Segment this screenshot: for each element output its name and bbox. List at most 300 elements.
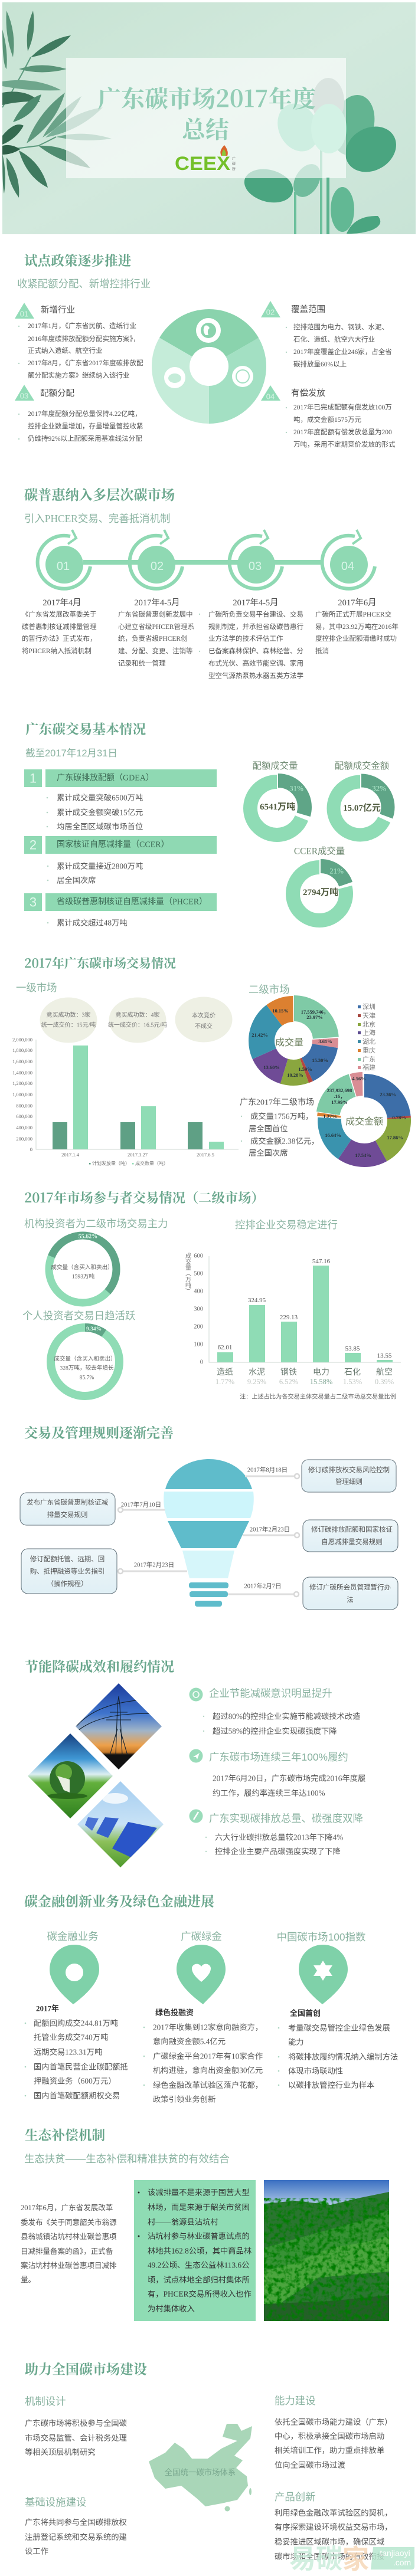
- title card: [66, 58, 346, 178]
- block: mechanism design: 广东碳市场将积极参与全国碳: [25, 2418, 127, 2427]
- ring: institutions: 55.62%: [79, 1233, 97, 1240]
- column: green finance: 广碳绿金平台2017年有10家合作: [153, 2051, 263, 2060]
- donut: secondary market volume: 15.30%: [312, 1057, 328, 1063]
- block 03: allocation: 03: [20, 392, 28, 400]
- column: green finance: 意向融资金额5.4亿元: [153, 2037, 226, 2046]
- step 3 text: 业方法学的技术评估工作: [208, 634, 283, 643]
- donut: secondary market amount: 16.64%: [325, 1132, 341, 1138]
- donut: CCER volume: 2794万吨: [303, 887, 338, 897]
- finding 1: 超过58%的控排企业实现碳强度下降: [213, 1726, 337, 1736]
- rule: 2017-07-10: 排量交易规则: [47, 1510, 87, 1519]
- donut: secondary market amount: [323, 1076, 406, 1158]
- column: carbon 100 index: 考量碳交易管控企业绿色发展: [288, 2023, 390, 2032]
- ring: institutions: 成交量（含买入和卖出）: [51, 1263, 113, 1271]
- rule: 2017-02-23 right: 2017年2月23日: [250, 1526, 290, 1533]
- green callout: 有，PHCER交易所得收入也作: [148, 2289, 252, 2299]
- step 2 text: 心建立省级PHCER管理系: [118, 622, 194, 631]
- block 01: new industries: 额分配实施方案》继续纳入该行业: [28, 371, 130, 379]
- green callout: 为村集体收入: [148, 2305, 195, 2313]
- bar chart: industries: 300: [194, 1306, 203, 1312]
- bar chart: industries: 钢铁: [280, 1366, 297, 1378]
- secondary market label: 二级市场: [249, 984, 290, 995]
- legend: 上海: [363, 1028, 375, 1037]
- hero banner: [2, 2, 416, 234]
- finding 2: [189, 1749, 365, 1797]
- donut: quota amount: 15.07亿元: [343, 803, 381, 813]
- finding 2: 约工作，履约率连续三年达100%: [213, 1788, 325, 1797]
- green callout: 49.2公顷、生态公益林113.6公: [148, 2261, 249, 2269]
- illustration: olive leaves: [2, 11, 112, 198]
- block 04: paid issuance: 04: [266, 392, 275, 401]
- block 04: paid issuance: 万吨，采用不定期竞价发放的形式: [293, 440, 396, 448]
- donut: secondary market volume: 23.97%: [306, 1014, 323, 1020]
- legend: 天津: [363, 1012, 375, 1020]
- block: infrastructure: 广东将共同参与全国碳排放权: [25, 2517, 127, 2526]
- green callout: 林场，而是来源于韶关市贫困: [148, 2202, 250, 2211]
- block 01: new industries: 2017年8月，《广东省2017年度碳排放配: [28, 359, 143, 367]
- rule: 2017-02-23 right: 自愿减排量交易规则: [321, 1538, 383, 1546]
- block: mechanism design: 等相关顶层机制研究: [25, 2447, 96, 2457]
- subheading: institutions: 机构投资者为二级市场交易主力: [24, 1218, 168, 1230]
- step 2 text: 广东省碳普惠创新发展中: [118, 610, 192, 618]
- column: green finance: 2017年收集到12家意向融资方，: [153, 2023, 263, 2032]
- donut: secondary market volume: 1.59%: [298, 1066, 312, 1072]
- bar chart: industries: 400: [194, 1289, 203, 1294]
- light bulb graphic: [164, 1459, 254, 1607]
- block: product innovation: 利用绿色金融改革试验区的契机，: [275, 2508, 392, 2517]
- rule: 2017-08-18: 管理细则: [335, 1477, 363, 1486]
- bar chart: industries: 1.77%: [215, 1378, 234, 1386]
- timeline node 02: 02: [151, 560, 164, 573]
- block: capacity building: [275, 2395, 392, 2470]
- block: mechanism design: [25, 2395, 127, 2457]
- bar chart: industries: 53.85: [345, 1345, 360, 1352]
- heading: 节能降碳成效和履约情况: [25, 1656, 174, 1676]
- step 4 text: 抵消: [315, 647, 329, 655]
- green callout: 沾坑村参与林业碳普惠试点的: [148, 2231, 250, 2241]
- block: infrastructure: 设工作: [25, 2546, 48, 2556]
- step 3 text: 已备案森林保护、森林经营、分: [208, 647, 303, 655]
- logo: CEEX: 碳: [232, 160, 236, 166]
- timeline node 01: [38, 530, 90, 589]
- y axis labels: [12, 1037, 32, 1152]
- donut: secondary market amount: 237,932,698: [327, 1087, 352, 1093]
- finding 2: 广东碳市场连续三年100%履约: [209, 1751, 348, 1763]
- auction bubbles: 统一成交价：15元/吨: [41, 1021, 96, 1029]
- y axis labels: 200,000: [16, 1136, 32, 1142]
- heading: 2017年广东碳市场交易情况: [24, 954, 176, 972]
- step 4 text: 度控排企业配额清缴时成功: [315, 634, 397, 643]
- rule: 2017-02-07: 法: [347, 1595, 354, 1604]
- donut: secondary market amount: 成交金额: [345, 1113, 383, 1128]
- body text: 2017年6月，广东省发展改革: [21, 2203, 113, 2212]
- section: PHCER: [22, 484, 399, 680]
- donut: quota amount: [334, 759, 389, 835]
- bar chart: industries: [184, 1253, 401, 1386]
- block: product innovation: 有序探索建设环境权益交易市场，: [275, 2522, 392, 2531]
- title text: 广东碳市场2017年度: [97, 80, 316, 114]
- column: green finance: 政策引领业务创新: [153, 2095, 215, 2104]
- step 1 text: 将PHCER纳入抵消机制: [22, 647, 92, 655]
- auction bubbles: 竞买成功数：3家: [46, 1011, 91, 1018]
- green callout: [134, 2180, 256, 2321]
- item 3: PHCER: [24, 893, 217, 928]
- block 02: coverage: 碳排放量60%以上: [293, 360, 347, 368]
- rule: 2017-02-23 right: [243, 1520, 398, 1552]
- rule: 2017-08-18: [245, 1460, 396, 1492]
- legend: 湖北: [363, 1038, 375, 1046]
- column: carbon finance business: 国内首笔碳配额期权交易: [34, 2091, 120, 2100]
- bar chart: industries: 石化: [344, 1366, 361, 1378]
- rule: 2017-02-07: 修订广碳所会员管理暂行办: [309, 1583, 391, 1591]
- block 04: paid issuance: [261, 385, 396, 448]
- photo diamond: power tower: [76, 1683, 162, 1769]
- section: basic trading situation: [24, 719, 389, 928]
- chart note: 注：上述占比为各交易主体交易量占二级市场总交易量比例: [240, 1391, 396, 1401]
- timeline node 02: [130, 530, 182, 589]
- finding 1: 超过80%的控排企业实施节能减碳技术改造: [213, 1711, 360, 1720]
- block: mechanism design: 市场交易监管、会计税务处理: [25, 2433, 127, 2443]
- section: emission reduction: [25, 1656, 365, 1867]
- step 3 text: 广碳所负责交易平台建设、交易: [208, 610, 303, 618]
- heading: 碳普惠纳入多层次碳市场: [24, 484, 175, 504]
- bar chart: primary market: 2017.1.4: [61, 1152, 80, 1158]
- column: green finance: 广碳绿金: [181, 1931, 222, 1942]
- step 1 text: 的暂行办法》正式发布，: [22, 634, 97, 643]
- step 1 text: [22, 598, 97, 655]
- y axis labels: 2,000,000: [12, 1037, 32, 1043]
- column: carbon 100 index: [277, 1931, 398, 2090]
- finding 2: 2017年6月20日，广东碳市场完成2016年度履: [213, 1774, 365, 1783]
- column: carbon 100 index: 体现市场联动性: [288, 2066, 343, 2076]
- bar chart: industries: 600: [194, 1253, 203, 1259]
- bar chart: industries: 229.13: [280, 1314, 298, 1321]
- donut: secondary market volume: 21.42%: [252, 1032, 268, 1038]
- column: carbon finance business: 托管业务成交740万吨: [34, 2032, 108, 2041]
- block 01: new industries: 正式纳入造纸、航空行业: [28, 346, 103, 355]
- block 01: new industries: 新增行业: [41, 305, 75, 315]
- column: carbon 100 index: 中国碳市场100指数: [277, 1931, 365, 1943]
- item 1: GDEA: 均居全国区域碳市场首位: [57, 821, 143, 831]
- donut: quota amount: 32%: [372, 784, 386, 793]
- rule: 2017-02-23 left: 修订配额托管、远期、回: [30, 1555, 105, 1563]
- block: product innovation: 稳妥推进区域碳市场，确保区域: [275, 2537, 384, 2546]
- Guangdong secondary market summary: 成交金额2.38亿元，: [250, 1136, 319, 1146]
- item 3: PHCER: 累计成交超过48万吨: [57, 918, 128, 928]
- heading: 助力全国碳市场建设: [25, 2359, 147, 2378]
- y axis labels: 600,000: [16, 1113, 32, 1119]
- subheading: 截至2017年12月31日: [25, 748, 117, 759]
- block 01: new industries: 2016年度碳排放配额分配实施方案》，: [28, 335, 140, 343]
- step 4 text: [315, 598, 399, 655]
- bar chart: industries: 9.25%: [247, 1378, 266, 1386]
- column: carbon 100 index: 将碳排放履约情况纳入编制方法: [288, 2052, 398, 2062]
- legend: 深圳: [363, 1003, 375, 1011]
- logo: CEEX: 广: [232, 156, 236, 160]
- item 3: PHCER: 3: [30, 894, 37, 910]
- donut: quota volume: 31%: [289, 784, 303, 793]
- column: carbon finance business: 国内首笔民营企业碳配额抵: [34, 2062, 128, 2071]
- ring: individuals: 成交量（含买入和卖出）: [54, 1354, 116, 1362]
- subheading: 引入PHCER交易、完善抵消机制: [24, 513, 170, 525]
- ring: individuals: [51, 1326, 119, 1396]
- item 1: GDEA: 累计成交金额突破15亿元: [57, 807, 143, 817]
- rule: 2017-02-23 left: 2017年2月23日: [134, 1561, 174, 1568]
- column: green finance: 绿色金融改革试验区落户花都，: [153, 2080, 263, 2090]
- column: carbon finance business: 配额回购成交244.81万吨: [34, 2018, 118, 2027]
- bar chart: primary market: 成交数量（吨）: [135, 1160, 168, 1167]
- block 03: allocation: 2017年度配额分配总量保持4.22亿吨，: [28, 409, 142, 418]
- pie graphic: [156, 314, 262, 419]
- bar chart: industries: 62.01: [218, 1344, 232, 1351]
- rule: 2017-02-07: 2017年2月7日: [244, 1582, 281, 1589]
- section: national market: [25, 2359, 414, 2576]
- Guangdong secondary market summary: 居全国次席: [249, 1148, 288, 1158]
- watermark: tanjiaoyi: [380, 2548, 410, 2558]
- rule: 2017-02-07: [228, 1577, 398, 1610]
- block: infrastructure: 基础设施建设: [25, 2496, 86, 2508]
- block 04: paid issuance: 有偿发放: [291, 388, 325, 398]
- y axis labels: 1,800,000: [12, 1047, 32, 1053]
- block: infrastructure: 注册登记系统和交易系统的建: [25, 2532, 127, 2542]
- body text: 案沾坑村林业碳普惠项目减排: [21, 2261, 117, 2270]
- body text: 目减排量备案的函》，正式备: [21, 2247, 113, 2256]
- title card: 总结: [182, 111, 229, 145]
- donut: secondary market amount: 17.86%: [387, 1135, 403, 1140]
- body text: 县翁城镇沾坑村林业碳普惠项: [21, 2232, 117, 2241]
- photo diamond: green globe: [28, 1733, 113, 1818]
- step 4 text: 2017年6月: [338, 598, 377, 608]
- watermark: [289, 2537, 414, 2576]
- section: ecological compensation: [21, 2125, 389, 2321]
- map of China: [149, 2424, 252, 2511]
- column: carbon finance business: 押融资业务（600万元）: [34, 2077, 116, 2085]
- Guangdong secondary market summary: 成交量1756万吨，: [250, 1112, 313, 1121]
- column: carbon 100 index: 以碳排放管控行业为样本: [288, 2080, 374, 2090]
- body text: 量。: [21, 2276, 35, 2284]
- finding 3: [189, 1809, 363, 1856]
- item 2: CCER: 累计成交量接近2800万吨: [57, 861, 143, 871]
- item 2: CCER: 国家核证自愿减排量（CCER）: [57, 839, 169, 850]
- rule: 2017-07-10: 发布广东省碳普惠制核证减: [27, 1498, 108, 1506]
- finding 1: 企业节能减碳意识明显提升: [209, 1687, 332, 1699]
- block: product innovation: 碳市场和全国碳市场的有效衔接: [275, 2551, 384, 2561]
- section: participants: [22, 1188, 401, 1401]
- logo: CEEX: 所: [232, 166, 236, 171]
- step 3 text: 型空气源热泵热水器五类方法学: [208, 671, 303, 680]
- timeline graphic: [38, 530, 375, 589]
- bar chart: industries: 15.58%: [310, 1378, 332, 1386]
- bar chart: industries: 100: [194, 1342, 203, 1348]
- finding 3: 六大行业碳排放总量较2013年下降4%: [215, 1833, 343, 1842]
- block: product innovation: 产品创新: [275, 2491, 316, 2503]
- Guangdong secondary market summary: [240, 1097, 319, 1158]
- ring: individuals: 85.7%: [80, 1375, 94, 1381]
- item 1: GDEA: 累计成交量突破6500万吨: [57, 793, 143, 802]
- rule: 2017-08-18: 2017年8月18日: [247, 1466, 288, 1474]
- item 1: GDEA: 广东碳排放配额（GDEA）: [57, 773, 154, 782]
- ring: individuals: 328万吨，较去年增长: [60, 1364, 114, 1371]
- rule: 2017-02-23 right: 修订碳排放配额和国家核证: [311, 1525, 393, 1533]
- section: rules: [20, 1422, 398, 1610]
- watermark: .com: [393, 2558, 411, 2567]
- block 04: paid issuance: 2017年已完成配额有偿发放100万: [293, 403, 392, 411]
- donut: secondary market amount: 17.99%: [331, 1099, 348, 1105]
- photo diamond: solar panels: [77, 1781, 164, 1867]
- item 2: CCER: [24, 836, 217, 885]
- step 2 text: [118, 598, 200, 667]
- section: pilot policy: [15, 251, 396, 448]
- step 3 text: [208, 598, 303, 680]
- block 03: allocation: 配额分配: [40, 388, 74, 398]
- watermark: 易碳家: [289, 2537, 369, 2576]
- item 3: PHCER: 省级碳普惠制核证自愿减排量（PHCER）: [57, 897, 207, 906]
- rule: 2017-02-23 left: 购、抵押融资等业务指引: [30, 1567, 105, 1575]
- heading: 2017年市场参与者交易情况（二级市场）: [24, 1188, 264, 1207]
- item 2: CCER: 居全国次席: [57, 876, 96, 885]
- block 03: allocation: 仍维持92%以上配额采用基准线法分配: [28, 434, 142, 443]
- photo: forest: [264, 2180, 389, 2321]
- heading: 广东碳交易基本情况: [25, 719, 146, 738]
- step 1 text: 《广东省发展改革委关于: [22, 610, 97, 618]
- Guangdong secondary market summary: 居全国首位: [249, 1123, 288, 1133]
- bar chart: industries: 6.52%: [279, 1378, 298, 1386]
- donut: quota volume: 配额成交量: [253, 759, 298, 772]
- donut: secondary market volume: 3.61%: [318, 1038, 332, 1044]
- block 02: coverage: [261, 301, 392, 368]
- timeline node 01: 01: [57, 560, 70, 573]
- bar chart: industries: 造纸: [217, 1366, 233, 1378]
- block: capacity building: 位向全国碳市场过渡: [275, 2460, 345, 2470]
- ring: institutions: 1593万吨: [72, 1273, 95, 1280]
- heading: 生态补偿机制: [25, 2125, 105, 2144]
- column: carbon finance business: 2017年: [36, 2004, 59, 2013]
- timeline node 04: 04: [341, 560, 354, 573]
- donut: secondary market amount: .16，: [334, 1093, 345, 1099]
- donut: quota volume: 6541万吨: [260, 802, 295, 812]
- block 02: coverage: 控排范围为电力、钢铁、水泥、: [293, 323, 388, 331]
- green callout: 顷，试点林地全部归村集体所: [148, 2275, 250, 2285]
- legend: 重庆: [363, 1046, 375, 1054]
- donut: secondary market volume: 13.60%: [263, 1064, 280, 1070]
- block 03: allocation: [15, 385, 143, 443]
- bar chart: industries: 547.16: [312, 1258, 331, 1265]
- subheading: 收紧配额分配、新增控排行业: [17, 278, 151, 290]
- rule: 2017-07-10: [20, 1493, 165, 1525]
- step 4 text: 广碳所正式开展PHCER交: [315, 610, 392, 618]
- block 02: coverage: 石化、造纸、航空六大行业: [293, 335, 375, 343]
- rule: 2017-02-23 left: （操作规程）: [47, 1579, 87, 1588]
- step 1 text: 碳普惠制核证减排量管理: [22, 622, 97, 631]
- step 4 text: 易，其中23.92万吨在2016年: [315, 622, 399, 631]
- y axis labels: 400,000: [16, 1125, 32, 1130]
- bar chart: primary market: 计划发放量（吨）: [92, 1160, 130, 1167]
- donut: CCER volume: 21%: [329, 866, 344, 876]
- donut: secondary market amount: 23.36%: [380, 1092, 396, 1097]
- block 01: new industries: 01: [20, 309, 28, 319]
- donut: quota amount: 配额成交金额: [335, 759, 389, 772]
- item 1: GDEA: [24, 769, 217, 831]
- block 01: new industries: 2017年1月，《广东省民航、造纸行业: [28, 322, 136, 330]
- bar chart: industries: 1.53%: [343, 1378, 362, 1386]
- block: mechanism design: 机制设计: [25, 2395, 66, 2407]
- block 04: paid issuance: 吨，成交金额1575万元: [293, 415, 361, 424]
- donut: secondary market amount: 4.56%: [352, 1076, 366, 1081]
- donut: quota volume: [250, 759, 305, 835]
- bar chart: industries: 0: [200, 1359, 203, 1365]
- timeline node 03: [230, 530, 282, 589]
- item 2: CCER: 2: [30, 838, 37, 852]
- column: carbon 100 index: 全国首创: [290, 2008, 321, 2018]
- legend: [358, 1003, 375, 1071]
- timeline node 04: [322, 530, 375, 589]
- finding 3: 控排企业主要产品碳强度实现了下降: [215, 1847, 341, 1856]
- body text: 委发布《关于同意韶关市翁源: [21, 2218, 117, 2227]
- step 2 text: 统，负责省级PHCER创: [118, 634, 188, 643]
- body text: [21, 2203, 117, 2284]
- step 2 text: 2017年4-5月: [134, 598, 180, 608]
- bar chart: industries: 13.55: [377, 1352, 392, 1359]
- item 1: GDEA: 1: [30, 771, 37, 786]
- auction bubbles: 统一成交价：16.5元/吨: [108, 1021, 167, 1029]
- block 01: new industries: [15, 303, 143, 379]
- green callout: 林地共162.8公顷，其中商品林: [148, 2247, 252, 2255]
- primary market label: 一级市场: [16, 982, 57, 994]
- bar chart: industries: 500: [194, 1271, 203, 1277]
- bar chart: primary market: [12, 1037, 239, 1167]
- block 02: coverage: 02: [266, 308, 275, 316]
- rule: 2017-02-23 left: [21, 1549, 187, 1594]
- bar chart: industries: 200: [194, 1324, 203, 1330]
- bar chart: industries: 电力: [313, 1366, 329, 1378]
- column: green finance: [143, 1931, 263, 2104]
- bar chart: industries: 324.95: [248, 1297, 266, 1304]
- block 04: paid issuance: 2017年度配额有偿发放总量为200: [293, 428, 392, 436]
- donut: CCER volume: [293, 846, 347, 920]
- auction bubbles: 不成交: [195, 1021, 213, 1030]
- step 3 text: 规则制定，并承担省级碳普惠行: [208, 622, 303, 631]
- finding 1: [189, 1687, 360, 1736]
- green callout: 村——翁源县沾坑村: [148, 2217, 218, 2227]
- ring: individuals: 9.34%: [86, 1326, 102, 1332]
- illustration: clover leaves: [240, 78, 404, 234]
- legend: 福建: [363, 1063, 375, 1071]
- auction bubbles: [40, 997, 233, 1043]
- rule: 2017-07-10: 2017年7月10日: [121, 1501, 161, 1508]
- heading: 试点政策逐步推进: [24, 251, 132, 270]
- bar chart: primary market: 2017.6.5: [197, 1152, 214, 1158]
- step 3 text: 2017年4-5月: [233, 598, 279, 608]
- ring: institutions: [39, 1225, 126, 1313]
- y axis labels: 0: [30, 1146, 32, 1152]
- bar chart: industries: 水泥: [249, 1366, 265, 1378]
- heading: 碳金融创新业务及绿色金融进展: [24, 1890, 214, 1910]
- step 2 text: 建、分配、变更、注销等: [118, 647, 192, 655]
- donut: CCER volume: CCER成交量: [294, 846, 345, 857]
- subheading: 生态扶贫——生态补偿和精准扶贫的有效结合: [24, 2153, 230, 2165]
- section: carbon finance: [24, 1890, 398, 2104]
- block: capacity building: 依托全国碳市场能力建设（广东）: [275, 2417, 392, 2426]
- donut: secondary market amount: 1.27%: [323, 1113, 337, 1119]
- bar chart: industries: 成交量（万吨）: [184, 1253, 192, 1294]
- y axis labels: 1,600,000: [12, 1058, 32, 1064]
- block: infrastructure: [25, 2496, 127, 2556]
- column: carbon finance business: [25, 1931, 128, 2100]
- donut: secondary market volume: 10.15%: [272, 1008, 289, 1014]
- Guangdong secondary market summary: 广东2017年二级市场: [240, 1097, 314, 1107]
- donut: secondary market volume: 10.28%: [287, 1072, 303, 1078]
- donut: secondary market volume: 成交量: [275, 1034, 303, 1048]
